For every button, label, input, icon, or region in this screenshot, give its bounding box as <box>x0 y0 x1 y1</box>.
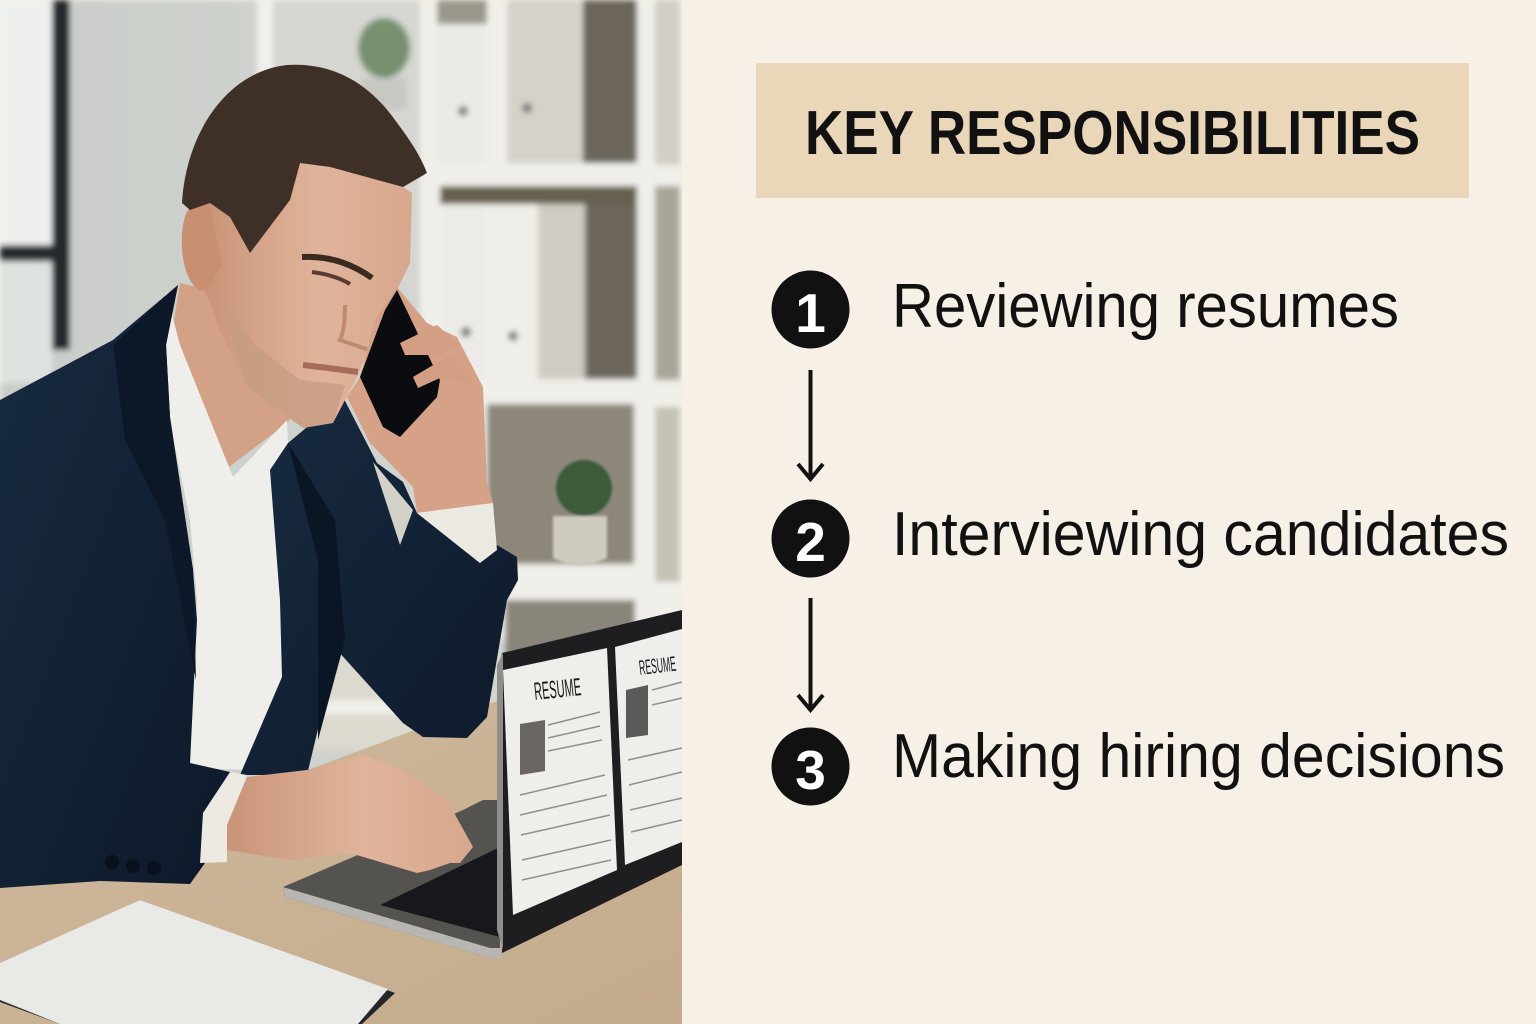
laptop lid <box>497 610 682 953</box>
resume page left <box>503 648 617 915</box>
notebook <box>0 900 395 1024</box>
fingers over phone <box>400 325 475 388</box>
man: white shirt <box>155 292 288 770</box>
shirt cuff raised arm <box>417 503 497 563</box>
step 1: 1 <box>795 282 826 344</box>
hand holding phone <box>347 287 493 513</box>
man: neck <box>170 283 305 470</box>
heading: KEY RESPONSIBILITIES <box>805 99 1420 168</box>
arrow: step 2 to 3 <box>798 598 823 710</box>
man: head <box>182 163 412 428</box>
panel: key responsibilities <box>682 0 1536 1024</box>
man: cuff and hand on trackpad <box>200 755 473 873</box>
desk <box>0 700 682 1024</box>
panel: photo of recruiter on the phone <box>0 0 690 1024</box>
laptop <box>283 610 682 958</box>
heading <box>756 63 1469 198</box>
step 3: Making hiring decisions <box>892 722 1505 791</box>
panel: photo of recruiter on the phone: RESUME <box>638 653 677 680</box>
plant pot on lower shelf <box>553 460 612 565</box>
beige panel background <box>682 0 1536 1024</box>
step 3: 3 <box>795 739 826 801</box>
laptop base <box>283 800 500 958</box>
arrow: step 1 to 2 <box>798 370 823 479</box>
step 1 <box>772 270 1399 348</box>
step 1: Reviewing resumes <box>892 272 1399 341</box>
blurred office background <box>0 0 690 1024</box>
step 3 <box>772 722 1505 806</box>
man: jacket <box>0 285 518 888</box>
step 2: Interviewing candidates <box>892 500 1509 569</box>
step 2: 2 <box>795 511 826 573</box>
man: hair <box>182 65 427 253</box>
resume page left: RESUME <box>533 673 582 706</box>
phone <box>360 290 440 437</box>
resume page right <box>615 629 682 865</box>
